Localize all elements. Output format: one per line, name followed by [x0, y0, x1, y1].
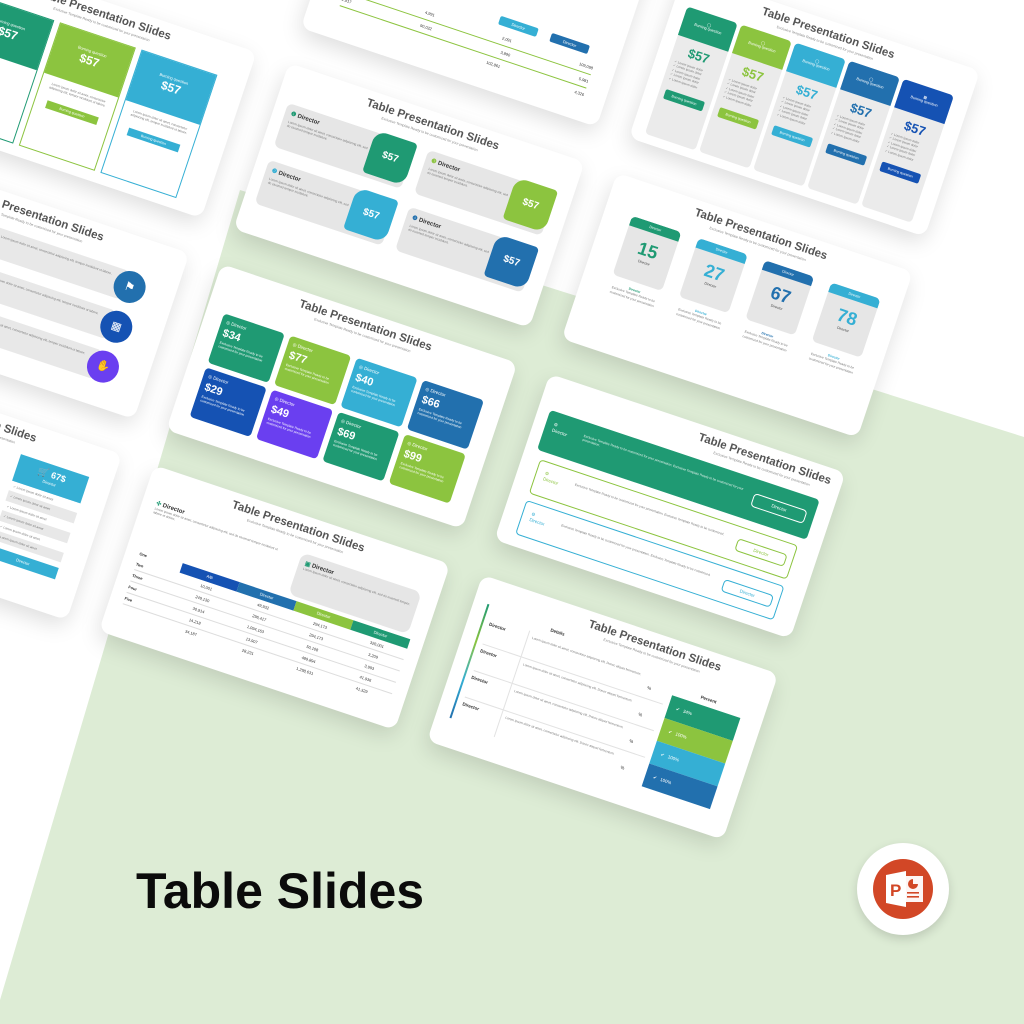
tile $77: Exclusive Template Ready to be customized for your presentation: [284, 363, 330, 385]
pricing column: Director: [42, 479, 57, 488]
calendar 67: Director: [782, 269, 794, 277]
pricing column: 🛒 67$: [37, 466, 67, 484]
card 4: [395, 207, 537, 293]
column cyan: ◯: [815, 59, 820, 64]
table rows: 4,326: [574, 89, 585, 97]
column teal: ✓ Lorem ipsum dolor: [670, 72, 699, 85]
column blue: ✓ Lorem ipsum dolor: [833, 122, 863, 135]
tile $40: [340, 358, 418, 427]
data table: 30,914: [192, 606, 205, 614]
tile $29: ◎ Director: [208, 374, 229, 385]
percent column: [642, 695, 740, 810]
slide: calendar numbers: Director: [827, 353, 840, 361]
rows: %: [620, 765, 625, 771]
slide: calendar numbers: Exclusive Template Ready to be customized for your presentation: [808, 352, 855, 375]
pricing column: Director: [15, 558, 30, 567]
tile $69: Exclusive Template Ready to be customized for your presentation: [332, 439, 378, 461]
rows: Lorem ipsum dolor sit amet, consectetur adipiscing elit. Donec aliquet fermentum.: [523, 662, 633, 703]
slide: three pricing cards: Exclusive Template Ready to be customized for your presentation: [53, 6, 150, 42]
table rows: 102,861: [486, 60, 501, 69]
tile $34: $34: [221, 327, 242, 344]
column blue: ✓ Lorem ipsum dolor: [832, 126, 861, 139]
slide: calendar numbers: Exclusive Template Ready to be customized for your presentation: [676, 308, 722, 330]
top-left director text: Lorem ipsum dolor sit amet, consectetur adipiscing elit, sed do eiusmod tempor incididunt ut labore et dolore.: [153, 506, 278, 551]
column lime: Burning question: [725, 112, 751, 124]
slide: five pricing columns: Table Presentation Slides: [760, 6, 896, 61]
icon: flag circle: [109, 267, 150, 307]
slide: percent table: Exclusive Template Ready to be customized for your presentation: [603, 638, 700, 674]
icon: calendar circle: [96, 307, 137, 347]
calendar 27: Director: [704, 281, 717, 289]
card lime: Burning question: [77, 44, 107, 59]
banner teal: Director: [771, 503, 787, 513]
table rows: 5,981: [578, 76, 589, 84]
slide: eight price tiles: [166, 264, 518, 529]
slide: four director cards with $57: $57: [502, 253, 521, 269]
calendar 78: [812, 282, 881, 358]
tile $69: [322, 412, 400, 481]
column lime: ✓ Lorem ipsum dolor: [728, 77, 758, 91]
data table: 296,417: [252, 613, 267, 622]
card cyan: $57: [159, 78, 183, 98]
slide: percent table: Table Presentation Slides: [587, 618, 723, 674]
tile $77: $77: [287, 349, 309, 367]
tile $40: Exclusive Template Ready to be customized for your presentation: [350, 385, 396, 407]
card teal: [0, 0, 54, 144]
tile $69: $69: [336, 426, 357, 443]
rows: %: [638, 712, 643, 718]
data table: 28,231: [241, 648, 255, 656]
option cyan: Director: [739, 588, 756, 598]
option lime: [529, 459, 798, 580]
calendar 27: 27: [702, 260, 727, 285]
tile $66: ◎ Director: [425, 386, 446, 398]
slide: five pricing columns: [629, 0, 980, 237]
icon: flag circle: ⚑: [122, 279, 137, 295]
slide: director table: Exclusive Template Ready to be customized for your presentation: [246, 518, 344, 554]
rows: %: [629, 738, 634, 744]
column lime: ✓ Lorem ipsum dolor: [724, 90, 753, 103]
card 3: [414, 150, 556, 236]
top-left director text: ✣ Director: [155, 501, 185, 516]
column lime: $57: [740, 64, 765, 85]
slide: director table: [99, 465, 450, 730]
row two: [0, 241, 115, 339]
card 1: Lorem ipsum dolor sit amet, consectetur adipiscing elit, sed do eiusmod tempor incididunt.: [286, 120, 368, 150]
icon: hand circle: [83, 346, 123, 387]
data table: 49,932: [257, 602, 270, 611]
column cyan: ✓ Lorem ipsum dolor: [780, 100, 810, 113]
slide: green banner options: Exclusive Template Ready to be customized for your presentation: [713, 451, 810, 487]
option lime: Exclusive Template Ready to be customized for your presentation. Exclusive Template Ready to be customized.: [574, 483, 725, 536]
column cyan: Burning question: [802, 59, 830, 72]
card 2: Lorem ipsum dolor sit amet, consectetur adipiscing elit, sed do eiusmod tempor incididunt.: [267, 177, 349, 207]
slide: three pricing cards: [0, 0, 257, 218]
pricing column: ✓ Lorem ipsum dolor sit amet: [6, 504, 47, 521]
column teal: ✓ Lorem ipsum dolor: [668, 76, 698, 89]
calendar 67: 67: [768, 282, 793, 308]
pricing column: ✓ Lorem ipsum dolor sit amet: [0, 524, 41, 541]
gray director box: [288, 552, 422, 634]
card 3: ❸ Director: [430, 158, 461, 174]
banner teal: [537, 410, 820, 540]
column blue: ✓ Lorem ipsum dolor: [836, 114, 866, 127]
card 1: [274, 103, 415, 189]
slide: five pricing columns: Exclusive Template Ready to be customized for your presentation: [776, 25, 874, 61]
icon: PowerPoint: [857, 843, 949, 935]
column teal: ✓ Lorem ipsum dolor: [671, 68, 701, 81]
colored side line: [449, 604, 489, 718]
banner teal: Exclusive Template Ready to be customized for your presentation. Exclusive Template Ready to be customized for your presentation.: [582, 434, 744, 491]
card cyan: [100, 50, 217, 198]
column lime: Burning question: [748, 41, 776, 54]
slide: percent table: [427, 575, 778, 840]
card cyan: Burning question: [140, 134, 167, 146]
data table: Director: [259, 591, 274, 601]
rows: Director: [471, 675, 489, 685]
column lime: [699, 25, 792, 168]
table header tags: [498, 16, 539, 37]
data table: 3,993: [364, 663, 375, 671]
column navy: Burning question: [910, 95, 938, 108]
rows: %: [647, 685, 652, 691]
slide: list with round icons: Lorem ipsum dolor sit amet, consectetur adipiscing elit, tempor incididunt ut labore.: [0, 235, 113, 276]
data table: 3,209: [368, 652, 379, 660]
slide: calendar numbers: Exclusive Template Ready to be customized for your presentation: [709, 226, 806, 262]
data table: Three: [132, 573, 143, 581]
column navy: Burning question: [887, 167, 913, 179]
tile $99: [389, 434, 466, 504]
column cyan: Burning question: [779, 130, 805, 143]
calendar 15: [613, 216, 681, 291]
card 4: Lorem ipsum dolor sit amet, consectetur adipiscing elit, sed do eiusmod tempor incididunt.: [408, 224, 489, 254]
tile $69: ◎ Director: [340, 418, 362, 430]
option lime: Director: [542, 476, 559, 486]
data table: 13,907: [245, 636, 258, 645]
column teal: Burning question: [671, 94, 697, 106]
tile $40: $40: [354, 372, 375, 389]
tile $99: ◎ Director: [407, 440, 428, 452]
rows: Director: [488, 622, 506, 632]
column teal: Burning question: [694, 23, 722, 36]
rows: Lorem ipsum dolor sit amet, consectetur adipiscing elit. Donec aliquet fermentum.: [514, 689, 624, 729]
slide: green banner options: [494, 374, 846, 639]
calendar 15: 15: [635, 238, 661, 263]
column navy: $57: [902, 118, 928, 139]
table rows: 90,022: [419, 23, 433, 31]
column lime: ✓ Lorem ipsum dolor: [726, 82, 756, 95]
card lime: [19, 22, 136, 171]
column navy: [861, 79, 954, 223]
slide: list with round icons: [0, 154, 189, 419]
column navy: ✓ Lorem ipsum dolor: [884, 148, 914, 162]
column cyan: $57: [794, 82, 820, 103]
tile $99: Exclusive Template Ready to be customized for your presentation: [399, 461, 444, 484]
slide: number table: Director: [562, 39, 577, 48]
percent column: ✔ 100%: [668, 729, 687, 740]
gray director box: Lorem ipsum dolor sit amet, consectetur adipiscing elit, sed do eiusmod tempor.: [303, 567, 411, 606]
table rows: [340, 0, 594, 97]
column cyan: ✓ Lorem ipsum dolor: [778, 108, 807, 121]
data table: Five: [124, 596, 133, 603]
column lime: ✓ Lorem ipsum dolor: [725, 86, 755, 99]
tile $66: [407, 380, 484, 450]
card cyan: Lorem ipsum dolor sit amet, consectetur adipiscing elit, tempor incididunt ut labore.: [130, 109, 188, 136]
calendar 67: Director: [770, 303, 783, 311]
banner teal: Director: [551, 428, 568, 437]
data table: 294,173: [309, 632, 324, 641]
data table: A/B: [206, 573, 214, 580]
calendar 78: Director: [837, 326, 849, 333]
calendar 27: Director: [715, 247, 728, 255]
data table: 14,218: [188, 617, 201, 626]
card 2: ❷ Director: [271, 168, 301, 183]
card lime: $57: [78, 51, 101, 70]
slide: calendar numbers: Director: [628, 287, 641, 294]
gray director box: ▣ Director: [304, 561, 335, 576]
slide: calendar numbers: Director: [761, 331, 774, 339]
data table: 1,094,163: [246, 624, 265, 634]
tile $34: [208, 313, 285, 383]
data table: One: [139, 551, 148, 558]
icon: PowerPoint: P: [890, 881, 901, 900]
pricing column: ✓ Lorem ipsum dolor sit amet: [13, 484, 54, 502]
column blue: ✓ Lorem ipsum dolor: [830, 130, 860, 144]
option cyan: [515, 500, 785, 620]
table rows: 4,991: [424, 10, 436, 18]
tile $49: [256, 390, 333, 459]
column teal: ✓ Lorem ipsum dolor: [674, 59, 703, 73]
slide: calendar numbers: Table Presentation Slides: [693, 207, 829, 262]
table rows: 109,098: [578, 61, 594, 71]
percent column: ✔ 100%: [652, 775, 672, 785]
card lime: Lorem ipsum dolor sit amet, consectetur adipiscing elit, tempor incididunt ut labore.: [48, 82, 106, 108]
tile $66: $66: [420, 394, 441, 411]
column cyan: [753, 43, 846, 187]
card 1: ❶ Director: [290, 111, 320, 127]
tile $29: [190, 367, 267, 437]
data table: Director: [373, 629, 388, 639]
data table: 294,173: [312, 621, 328, 630]
slide: calendar numbers: Exclusive Template Ready to be customized for your presentation: [609, 285, 655, 308]
table header tags: Director: [511, 22, 526, 31]
tile $29: $29: [203, 381, 224, 399]
tile $34: Exclusive Template Ready to be customized for your presentation: [218, 341, 263, 363]
data table: 326,001: [369, 640, 385, 649]
row one: [0, 201, 129, 299]
column teal: ✓ Lorem ipsum dolor: [672, 63, 702, 77]
slide: calendar numbers: Director: [695, 309, 707, 316]
table rows: 2,091: [501, 35, 513, 43]
column navy: ✓ Lorem ipsum dolor: [889, 136, 918, 149]
slide: director table: Table Presentation Slides: [230, 499, 366, 555]
slide: four director cards with $57: Table Presentation Slides: [365, 97, 501, 153]
rows: Director: [462, 701, 480, 712]
data table: 489,894: [301, 655, 316, 664]
option cyan: Director: [529, 517, 545, 527]
data table: 34,187: [184, 629, 198, 637]
percent column: Percent: [700, 695, 717, 705]
option lime: Director: [753, 548, 769, 557]
rows: Lorem ipsum dolor sit amet, consectetur adipiscing elit. Donec aliquet fermentum.: [505, 716, 615, 756]
column navy: ✓ Lorem ipsum dolor: [886, 144, 915, 157]
column teal: ◯: [706, 23, 712, 28]
slide: four director cards with $57: Exclusive Template Ready to be customized for your presentation: [381, 116, 478, 152]
slide: pricing lists: [0, 355, 122, 620]
slide: number table: [301, 0, 652, 127]
card lime: Burning question: [59, 106, 85, 119]
tile $49: $49: [269, 404, 290, 421]
pricing column: [0, 454, 90, 580]
calendar 78: Director: [848, 292, 861, 299]
column blue: Burning question: [833, 148, 859, 161]
option cyan: Exclusive Template Ready to be customized for your presentation. Exclusive Template Ready to be customized.: [561, 523, 711, 577]
calendar 15: Director: [649, 225, 662, 233]
heading: Table Slides: Table Slides: [136, 863, 424, 919]
column teal: $57: [686, 46, 711, 67]
rows: [462, 622, 663, 771]
card 4: ❹ Director: [411, 215, 442, 230]
tile $34: ◎ Director: [226, 320, 247, 331]
column lime: ✓ Lorem ipsum dolor: [722, 94, 752, 107]
icon: hand circle: ✋: [95, 359, 111, 374]
slide: four director cards with $57: $57: [361, 206, 381, 222]
tile $66: Exclusive Template Ready to be customized for your presentation: [417, 407, 462, 430]
card 2: [255, 160, 396, 246]
column blue: Burning question: [856, 77, 884, 90]
column cyan: ✓ Lorem ipsum dolor: [779, 104, 809, 117]
data table: 41,936: [359, 674, 372, 683]
tile $29: Exclusive Template Ready to be customized for your presentation: [200, 395, 245, 417]
data table: Director: [316, 610, 331, 620]
data table: [122, 551, 410, 694]
column blue: ◯: [869, 77, 874, 82]
column cyan: ✓ Lorem ipsum dolor: [782, 95, 812, 109]
slide: eight price tiles: Table Presentation Slides: [298, 298, 433, 354]
calendar 15: Director: [637, 259, 650, 267]
tile $77: ◎ Director: [292, 342, 314, 353]
percent column: ✔ 100%: [660, 752, 680, 763]
card cyan: Burning question: [159, 72, 189, 86]
option lime: ⚙: [544, 471, 550, 477]
column cyan: ✓ Lorem ipsum dolor: [776, 112, 806, 125]
slide: four director cards with $57: $57: [521, 197, 540, 212]
icon: calendar circle: ▦: [109, 319, 123, 334]
rows: Director: [480, 648, 498, 658]
tile $40: ◎ Director: [358, 364, 380, 375]
column teal: [645, 6, 738, 150]
slide: eight price tiles: Exclusive Template Ready to be customized for your presentation: [314, 317, 411, 353]
pricing column: ✓ Lorem ipsum dolor sit amet: [3, 514, 44, 531]
row three: [0, 281, 102, 379]
data table: 10,001: [200, 583, 213, 592]
rows: Details: [550, 627, 565, 637]
card 3: Lorem ipsum dolor sit amet, consectetur adipiscing elit, sed do eiusmod tempor incididunt.: [427, 167, 509, 197]
pricing column: ✓ Lorem ipsum dolor sit amet: [9, 494, 50, 511]
calendar 27: [679, 238, 748, 313]
percent column: ✔ 34%: [675, 706, 693, 716]
column navy: ▦: [923, 95, 928, 100]
tile $99: $99: [402, 448, 423, 465]
banner teal: ⚙: [553, 422, 559, 428]
slide: four director cards with $57: $57: [381, 150, 400, 165]
column blue: [807, 61, 900, 205]
slide: four director cards with $57: [233, 63, 585, 328]
column navy: ✓ Lorem ipsum dolor: [890, 132, 920, 145]
data table: Four: [128, 584, 138, 592]
tile $49: Exclusive Template Ready to be customized for your presentation: [266, 417, 312, 439]
slide: calendar numbers: [562, 173, 913, 438]
data table: 41,329: [355, 686, 368, 694]
slide: green banner options: Table Presentation Slides: [697, 432, 833, 487]
rows: Lorem ipsum dolor sit amet, consectetur adipiscing elit. Donec aliquet fermentum.: [531, 636, 642, 676]
column blue: $57: [848, 100, 874, 121]
calendar 67: [745, 260, 814, 335]
column blue: ✓ Lorem ipsum dolor: [835, 118, 864, 131]
tile $49: ◎ Director: [274, 396, 295, 407]
data table: 1,298,631: [296, 666, 314, 676]
option cyan: ⚙: [531, 511, 536, 517]
calendar 78: 78: [834, 305, 860, 330]
data table: Two: [135, 561, 144, 569]
slide: calendar numbers: Exclusive Template Ready to be customized for your presentation: [742, 330, 788, 352]
table rows: 3,890: [500, 50, 511, 58]
data table: 50,108: [306, 644, 319, 652]
column lime: ◯: [760, 41, 766, 46]
data table: 249,130: [195, 594, 210, 603]
column navy: ✓ Lorem ipsum dolor: [887, 140, 917, 153]
tile $77: [274, 336, 351, 405]
